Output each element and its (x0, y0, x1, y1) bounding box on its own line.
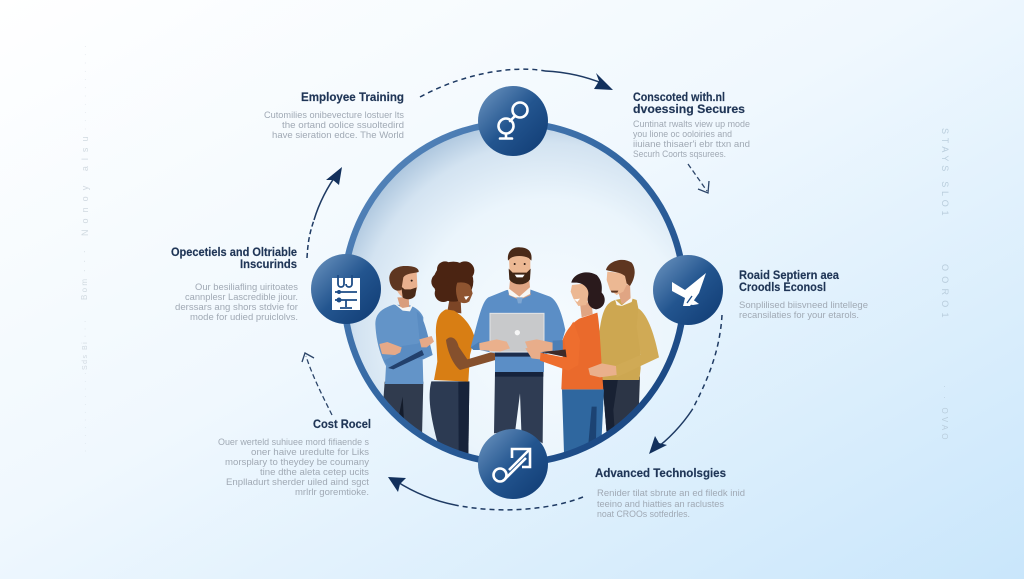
right vertical faint text: OORO1 (940, 264, 950, 318)
text block: Conscoted with: Securh Coorts sqsurees. (633, 149, 726, 160)
text block: Employee Training (264, 92, 404, 141)
text block: Employee Training: Employee Training (301, 92, 404, 104)
people group (375, 247, 659, 457)
left vertical faint text: Nonoy alsu (80, 136, 90, 236)
main ring (344, 123, 684, 463)
arrow: upper right (688, 164, 709, 193)
text block: Conscoted with: Cuntinat rwalts view up mode (633, 119, 750, 130)
arrow: right (649, 315, 722, 454)
text block: Cost Rocel (218, 419, 371, 498)
text block: Cost Rocel: Cost Rocel (313, 419, 371, 431)
text block: Opecetiels: Inscurinds (240, 259, 297, 271)
text block: Employee Training: the ortand oolice ssuoltedird (282, 120, 404, 131)
text block: Cost Rocel: Enplladurt sherder uiled aind sgct (226, 477, 369, 488)
text block: Opecetiels: derssars ang shors stdvie for (175, 302, 298, 313)
text block: Cost Rocel: tine dthe aleta cetep ucits (260, 467, 369, 478)
text block: Opecetiels: Opecetiels and Oltriable (171, 247, 297, 259)
text block: Roaid Septiern: Croodls Econosl (739, 282, 826, 294)
left vertical faint text (80, 45, 90, 452)
right vertical faint text: · · OVAO (940, 385, 949, 440)
left vertical faint text: Bom · · · (80, 250, 89, 300)
text block: Conscoted with (633, 92, 750, 160)
arrow: upper left (307, 167, 342, 258)
text block: Conscoted with: Conscoted with.nl (633, 92, 725, 104)
right vertical faint text (940, 128, 950, 440)
text block: Advanced Technologies (595, 468, 745, 520)
person: man with crossed arms (375, 266, 434, 437)
text block: Roaid Septiern: Roaid Septiern aea (739, 270, 840, 282)
left vertical faint text: · · · · · · · · · · · (83, 372, 89, 452)
person: woman with afro (430, 261, 495, 454)
text block: Cost Rocel: morsplary to theydey be coumany (225, 457, 369, 468)
text block: Advanced Technologies: Renider tilat sbrute an ed filedk inid (597, 488, 745, 499)
text block: Advanced Technologies: noat CROOs sotfedrles. (597, 509, 690, 520)
person: woman in orange top (525, 272, 605, 453)
arrow: bottom (388, 477, 583, 510)
person: man in tan sweater (597, 260, 641, 435)
text block: Roaid Septiern (739, 270, 868, 321)
text block: Cost Rocel: Ouer werteld suhiuee mord fifiaende s (218, 437, 369, 448)
left vertical faint text: · · · · · · · · · · · (83, 45, 89, 130)
text block: Conscoted with: iiuiane thisaer'i ebr ttxn and (633, 139, 750, 150)
badge: left calendar icon (311, 254, 381, 324)
text block: Cost Rocel: oner haive uredulte for Liks (251, 447, 369, 458)
badge: right check wing icon (653, 255, 723, 325)
text block: Advanced Technologies: Advanced Technolsgies (595, 468, 726, 480)
arrow: top (420, 69, 613, 97)
text block: Roaid Septiern: recansilaties for your etarols. (739, 310, 859, 321)
text block: Cost Rocel: mrlrlr goremtioke. (295, 487, 369, 498)
right vertical faint text: STAYS SLO1 (940, 128, 950, 216)
text block: Roaid Septiern: Sonplilised biisvneed lintellege (739, 300, 868, 311)
left vertical faint text: Sds Bi · · · (82, 320, 89, 370)
text block: Opecetiels (171, 247, 298, 323)
text block: Conscoted with: you lione oc ooloiries and (633, 129, 732, 140)
text block: Opecetiels: Our besiliafling uiritoates (195, 282, 298, 293)
arrow: lower left (302, 353, 332, 415)
text block: Opecetiels: cannplesr Lascrediblе jiour. (185, 292, 298, 303)
badge: top link icon (478, 86, 548, 156)
text block: Employee Training: have sieration edce. The World (272, 130, 404, 141)
text block: Opecetiels: mode for udied pruiclolvs. (190, 312, 298, 323)
text block: Employee Training: Cutomilies onibevecture lostuer lts (264, 110, 404, 121)
person: tan sweater arm and hand (588, 308, 659, 377)
text block: Advanced Technologies: teeino and hiatties an raclustes (597, 499, 724, 510)
text block: Conscoted with: dvoessing Secures (633, 104, 745, 116)
circle interior (344, 123, 684, 463)
person: man holding laptop (471, 247, 565, 443)
badge: bottom arrow key icon (478, 429, 548, 499)
